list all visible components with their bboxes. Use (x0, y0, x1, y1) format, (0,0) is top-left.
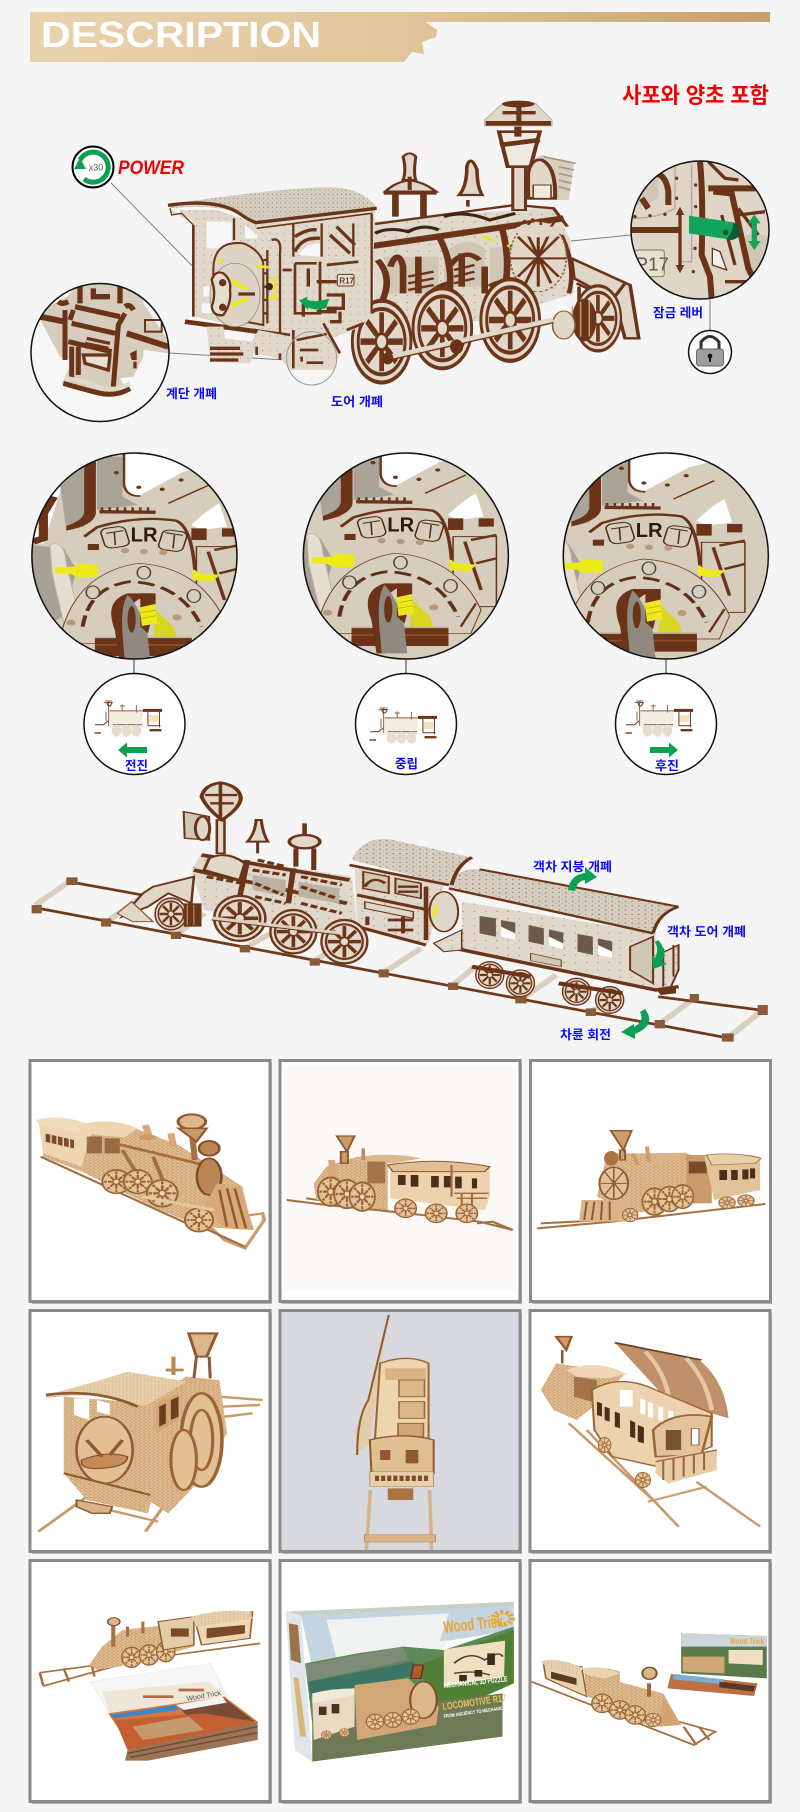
icon: padlock (688, 330, 732, 374)
passenger car (434, 869, 679, 1013)
panel: photo 9 train beside box (530, 1560, 772, 1804)
locomotive smokestack and lantern (485, 101, 552, 210)
badge: backward (616, 674, 716, 774)
illustration: locomotive with passenger car on rails (32, 783, 768, 1042)
panel: photo 8 product box (280, 1560, 522, 1804)
label: passenger roof opening: 객차 지붕 개폐 (533, 860, 612, 874)
illustration: locomotive (168, 101, 639, 385)
panel: photo 8 product box: FROM ANCIENCY TO MECHANICS (443, 1705, 506, 1720)
label: locking lever: 잠금 레버 (653, 305, 703, 320)
title banner: DESCRIPTION: DESCRIPTION (41, 14, 321, 55)
magnifier: stair opening (30, 283, 170, 423)
locomotive boiler (372, 205, 574, 328)
locomotive cab roof (168, 187, 377, 223)
locomotive front cover (528, 155, 576, 200)
label: stair opening: 계단 개폐 (166, 387, 217, 401)
title banner: DESCRIPTION (30, 12, 770, 62)
locomotive cab (168, 203, 377, 340)
panel: photo 3 train front right view (530, 1060, 772, 1304)
locomotive wheels and rod (155, 896, 367, 963)
locomotive underframe (207, 323, 363, 370)
locomotive bell (459, 161, 482, 207)
badge: forward (84, 674, 185, 774)
rails and sleepers (32, 877, 768, 1042)
badge: neutral (356, 674, 456, 774)
panel: photo 8 product box: MECHANICAL 3D PUZZLE (443, 1674, 508, 1690)
locomotive cab with roof (349, 839, 472, 945)
icon: power winding x30 (72, 146, 114, 188)
panel: photo 1 locomotive angled (30, 1060, 272, 1304)
green rotation arrow on door (299, 297, 329, 310)
magnifier: locking lever: P17 (636, 254, 669, 275)
panel: photo 6 carriage with open roof (530, 1310, 772, 1554)
badge: neutral: 중립 (395, 757, 418, 771)
label: wheel rotation: 차륜 회전 (560, 1028, 611, 1042)
connector lines for reverser states (134, 659, 666, 673)
leader lines for locomotive callouts (111, 183, 710, 360)
callout: sandpaper and candle included: 사포와 양초 포함 (622, 83, 769, 108)
locomotive wheels and cylinder (352, 279, 621, 382)
badge: backward: 후진 (655, 758, 679, 773)
locomotive body (117, 853, 357, 933)
door hinge ring (287, 332, 337, 385)
locomotive cab: R17 (339, 276, 355, 285)
arrow: roof opening (568, 867, 597, 891)
panel: photo 9 train beside box: Wood Trick (730, 1637, 764, 1646)
badge: forward: 전진 (125, 759, 148, 773)
panel: reverser backward magnified (562, 452, 770, 660)
magnifier: locking lever (630, 160, 772, 300)
arrow: door opening (652, 940, 667, 969)
panel: photo 8 product box: LOCOMOTIVE R17 (442, 1693, 507, 1713)
panel: photo 8 product box: Wood Trick (442, 1612, 504, 1637)
icon: power winding x30: x30 (89, 162, 103, 172)
panel: reverser forward magnified (31, 452, 238, 660)
panel: photo 7 train and open box (30, 1560, 272, 1804)
arrow: wheel rotation (621, 1009, 649, 1039)
locomotive cowcatcher (571, 258, 639, 338)
locomotive steam dome (384, 153, 437, 217)
panel: photo 2 train rear left view (280, 1060, 522, 1304)
panel: photo 7 train and open box: Wood Trick (186, 1690, 222, 1703)
panel: photo 4 cab rear view (30, 1310, 272, 1554)
panel: photo 5 carriage from above on grey (280, 1310, 522, 1554)
label: door opening: 도어 개폐 (331, 395, 383, 409)
locomotive stack, bell and dome (184, 783, 320, 870)
label: passenger door opening: 객차 도어 개폐 (667, 925, 746, 939)
label: POWER: POWER (118, 158, 184, 179)
panel: reverser neutral magnified (302, 452, 510, 660)
